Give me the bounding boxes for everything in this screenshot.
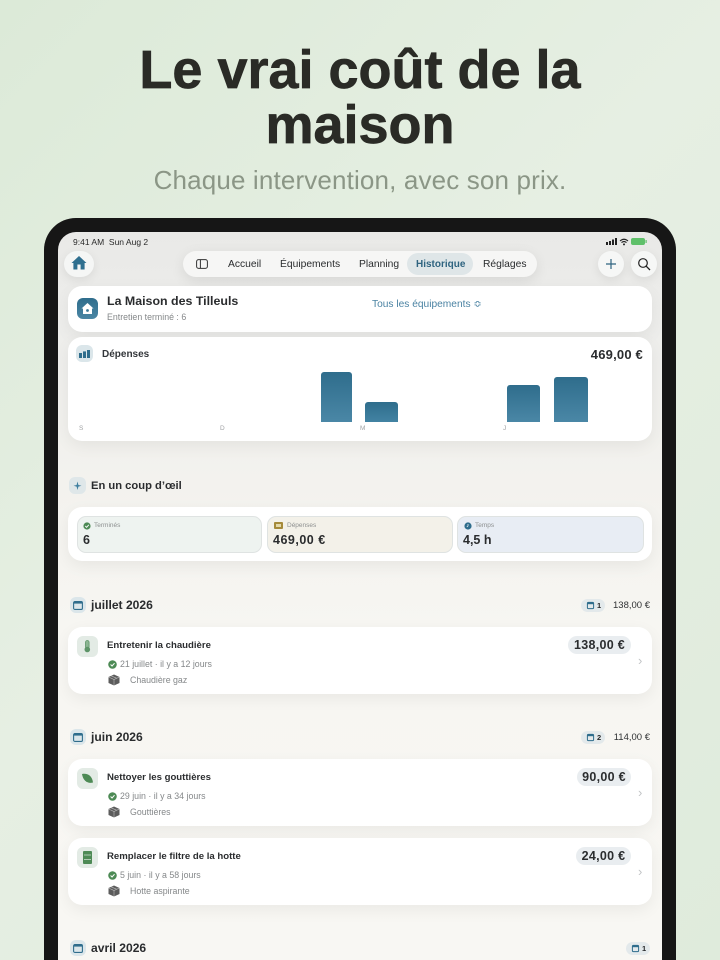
value: 469,00 €	[273, 533, 326, 547]
chart heading: Dépenses	[102, 349, 149, 360]
icon: done	[108, 660, 117, 669]
heading text: En un coup d’œil	[91, 480, 182, 492]
month total: 138,00 €	[613, 600, 650, 611]
price: 138,00 €	[574, 638, 625, 652]
count badge	[626, 942, 650, 955]
house name: La Maison des Tilleuls	[107, 294, 238, 308]
task title: Remplacer le filtre de la hotte	[107, 851, 241, 862]
icon: calendar	[70, 597, 86, 613]
label: Dépenses	[287, 522, 316, 529]
icon: clock	[464, 522, 472, 530]
month heading: juin 2026	[91, 730, 143, 744]
title: maison	[265, 95, 455, 155]
tab: Équipements: Équipements	[280, 259, 340, 270]
home button	[64, 251, 94, 277]
icon: done	[108, 871, 117, 880]
count badge	[581, 599, 605, 612]
status bar icons	[606, 238, 647, 246]
task title: Nettoyer les gouttières	[107, 772, 211, 783]
date: 5 juin · il y a 58 jours	[120, 870, 201, 880]
icon: box	[108, 674, 120, 686]
chevron: ›	[638, 653, 642, 668]
tab: Historique: Historique	[416, 259, 465, 270]
month total: 114,00 €	[614, 732, 650, 743]
count badge: 1	[642, 944, 646, 953]
count badge: 2	[597, 733, 601, 742]
label: Temps	[475, 522, 494, 529]
add button	[598, 251, 624, 277]
tablet device	[44, 218, 676, 960]
label: Terminés	[94, 522, 120, 529]
axis label J: J	[503, 425, 506, 432]
icon: plus	[606, 259, 616, 269]
icon: leaf	[77, 768, 98, 789]
price: 24,00 €	[582, 849, 625, 863]
price	[568, 636, 631, 654]
card: Nettoyer les gouttières	[68, 759, 652, 826]
icon: check	[83, 522, 91, 530]
price	[577, 768, 631, 786]
panel: summary stats	[68, 507, 652, 561]
tab: Accueil: Accueil	[228, 259, 261, 270]
stat: time	[457, 516, 644, 553]
tab: Planning: Planning	[359, 259, 399, 270]
chevron: ›	[638, 864, 642, 879]
equipment: Gouttières	[130, 807, 171, 817]
card: Entretenir la chaudière	[68, 627, 652, 694]
icon: sparkle	[69, 477, 86, 494]
icon: filter	[77, 847, 98, 868]
tab: Réglages: Réglages	[483, 259, 527, 270]
count badge	[581, 731, 605, 744]
bar: J1	[507, 385, 540, 422]
icon: sidebar	[196, 259, 208, 269]
equipment: Chaudière gaz	[130, 675, 187, 685]
icon: banknote	[274, 522, 283, 529]
month heading: juillet 2026	[91, 598, 153, 612]
house subtitle: Entretien terminé : 6	[107, 312, 186, 322]
icon: bars	[76, 345, 93, 362]
subtitle: Chaque intervention, avec son prix.	[154, 165, 566, 195]
section heading: glance	[69, 477, 182, 494]
status bar time: 9:41 AM Sun Aug 2	[73, 237, 148, 247]
icon: box	[108, 806, 120, 818]
task title: Entretenir la chaudière	[107, 640, 211, 651]
equipment: Hotte aspirante	[130, 886, 190, 896]
axis label D: D	[220, 425, 225, 432]
icon: done	[108, 792, 117, 801]
icon: search	[638, 258, 650, 270]
title: Le vrai coût de la	[139, 40, 581, 100]
panel: expenses chart	[68, 337, 652, 441]
navigation bar	[183, 251, 537, 277]
icon: thermometer	[77, 636, 98, 657]
value: 4,5 h	[463, 533, 492, 547]
stat: completed	[77, 516, 262, 553]
axis label S: S	[79, 425, 83, 432]
icon: home	[72, 256, 86, 270]
value: 6	[83, 533, 90, 547]
price	[576, 847, 631, 865]
icon: box	[108, 886, 120, 896]
date: 29 juin · il y a 34 jours	[120, 791, 206, 801]
section: avril 2026	[70, 940, 650, 956]
axis label M: M	[360, 425, 365, 432]
chart total: 469,00 €	[591, 347, 643, 362]
icon: house badge	[77, 298, 98, 319]
stat: expenses	[267, 516, 453, 553]
title	[139, 40, 582, 155]
count badge: 1	[597, 601, 601, 610]
equipment filter: Tous les équipements ≎	[372, 299, 482, 310]
tablet screen	[58, 232, 662, 960]
icon: calendar	[70, 729, 86, 745]
search button	[631, 251, 657, 277]
bar: J2	[554, 377, 588, 422]
selected tab highlight	[407, 253, 473, 275]
panel: house header	[68, 286, 652, 332]
date: 21 juillet · il y a 12 jours	[120, 659, 212, 669]
section: juin 2026	[70, 729, 650, 745]
chevron: ›	[638, 785, 642, 800]
card: Remplacer le filtre de la hotte	[68, 838, 652, 905]
bar: M2	[365, 402, 398, 422]
icon: calendar	[70, 940, 86, 956]
month heading: avril 2026	[91, 941, 146, 955]
price: 90,00 €	[582, 770, 626, 784]
bar: M1	[321, 372, 352, 422]
section: juillet 2026	[70, 597, 650, 613]
